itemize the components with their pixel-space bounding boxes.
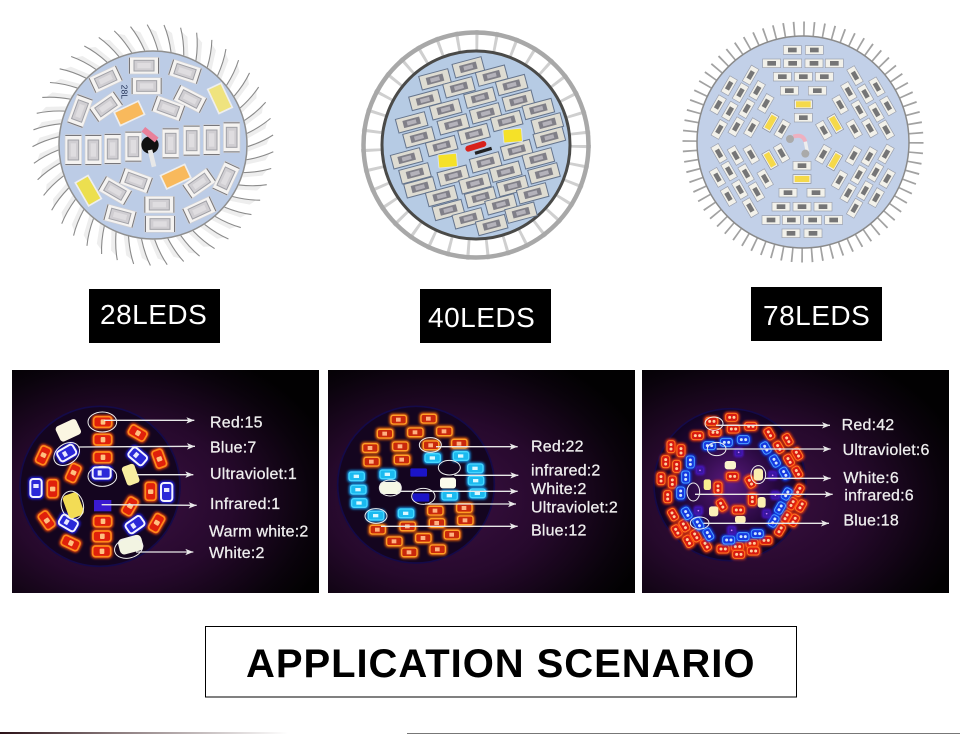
labels: [842, 417, 930, 530]
LED array: [390, 57, 566, 236]
callout rings: [49, 412, 145, 561]
lit board: [20, 406, 180, 566]
label: 40LEDS: [420, 289, 551, 343]
label: 78LEDS: [751, 287, 882, 341]
panel: 40 LEDs lit: [328, 370, 635, 593]
labels: Ultraviolet:1: [210, 466, 297, 483]
labels: Red:15: [210, 414, 263, 431]
labels: infrared:2: [531, 462, 601, 479]
LED array: 28L: [119, 85, 129, 99]
label: 28LEDS: [89, 289, 220, 343]
labels: Warm white:2: [209, 523, 309, 540]
bulb: 28 LEDs: [31, 23, 275, 267]
circuit board disc: [382, 51, 570, 239]
lit board: [654, 409, 809, 561]
labels: White:2: [209, 545, 265, 562]
heat sink fins: [31, 23, 275, 267]
lit board: [338, 406, 494, 563]
title: application scenario: [206, 626, 796, 697]
labels: Red:22: [531, 438, 584, 455]
callout arrows: [78, 420, 197, 552]
callout rings: [687, 417, 766, 529]
labels: Blue:7: [210, 439, 257, 456]
metal ring: [364, 32, 588, 258]
label: 40LEDS: 40LEDS: [428, 302, 535, 333]
LED array: [699, 46, 906, 238]
callout arrows: [695, 425, 833, 523]
bulb: 78 LEDs: [690, 29, 916, 255]
labels: Blue:18: [843, 513, 899, 530]
labels: infrared:6: [844, 487, 914, 504]
callout arrows: [381, 447, 518, 526]
bottom edge strips: [0, 732, 960, 734]
labels: [209, 414, 309, 562]
labels: Infrared:1: [210, 496, 280, 513]
bulb: 40 LEDs: [364, 32, 588, 258]
circuit board disc: [697, 36, 909, 248]
heat sink fins: [690, 29, 916, 255]
circuit board disc: [59, 51, 247, 239]
labels: Red:42: [842, 417, 894, 434]
LED array: [65, 57, 240, 232]
labels: Ultraviolet:2: [531, 500, 618, 517]
labels: White:6: [843, 470, 899, 487]
callout rings: [365, 438, 460, 523]
panel: 28 LEDs lit: [12, 370, 319, 593]
labels: [531, 438, 618, 539]
labels: White:2: [531, 481, 587, 498]
label: 28LEDS: 28LEDS: [100, 299, 207, 330]
label: 78LEDS: 78LEDS: [763, 300, 870, 331]
labels: Blue:12: [531, 522, 587, 539]
title: application scenario: APPLICATION SCENARIO: [246, 642, 755, 686]
panel: 78 LEDs lit: [642, 370, 949, 593]
labels: Ultraviolet:6: [843, 442, 930, 459]
